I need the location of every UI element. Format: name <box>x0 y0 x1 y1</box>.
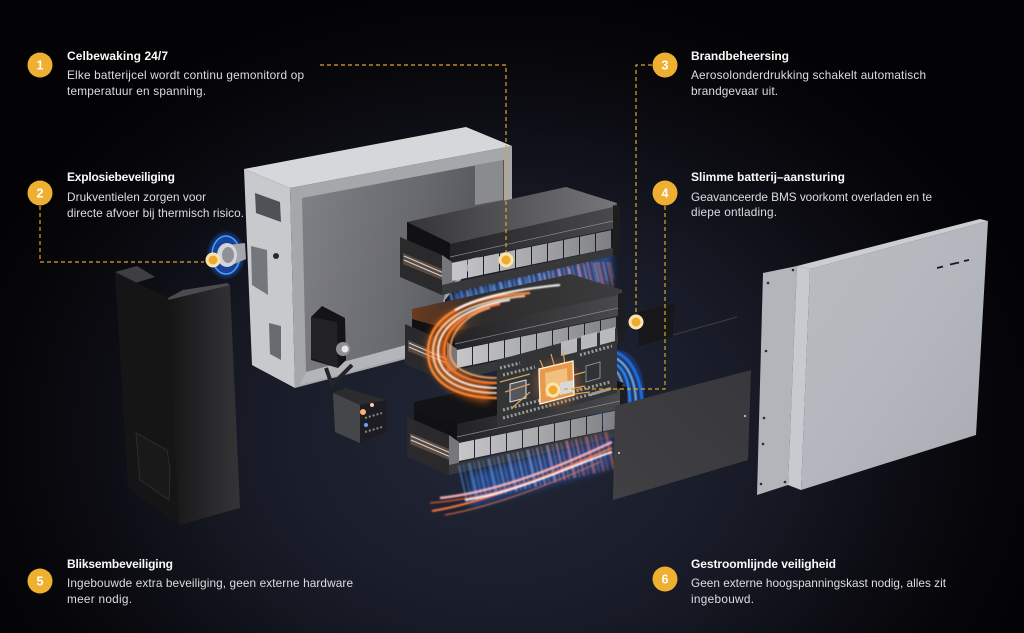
feature 6: Gestroomlijnde veiligheid <box>652 557 947 606</box>
feature 4: Slimme batterij-aansturing: Slimme batterij–aansturing <box>691 170 845 184</box>
feature 6: Gestroomlijnde veiligheid: Geen externe hoogspanningskast nodig, alles zit <box>691 576 947 590</box>
feature 5: Bliksembeveiliging <box>28 557 353 606</box>
feature 1: Celbewaking: Elke batterijcel wordt continu gemonitord op <box>67 68 304 82</box>
feature 4: Slimme batterij-aansturing <box>652 170 932 219</box>
energy streaks: blue arcs right <box>592 350 644 434</box>
feature 2: Explosiebeveiliging: Explosiebeveiliging <box>67 170 175 184</box>
sensor and breaker modules <box>311 306 387 443</box>
feature 5: Bliksembeveiliging: 5 <box>37 574 44 588</box>
energy streaks: bottom <box>430 435 612 515</box>
feature 2: Explosiebeveiliging: directe afvoer bij thermisch risico. <box>67 206 244 220</box>
energy streaks: orange loop <box>428 285 560 398</box>
battery module 2 <box>405 274 625 382</box>
feature 1: Celbewaking: temperatuur en spanning. <box>67 84 206 98</box>
battery module 1 <box>400 187 620 295</box>
feature 3: Brandbeheersing: Aerosolonderdrukking schakelt automatisch <box>691 68 926 82</box>
feature 4: Slimme batterij-aansturing: diepe ontlading. <box>691 205 777 219</box>
feature 4: Slimme batterij-aansturing: Geavanceerde BMS voorkomt overladen en te <box>691 190 932 204</box>
feature 5: Bliksembeveiliging: meer nodig. <box>67 592 132 606</box>
callout line 3 <box>636 65 652 315</box>
feature 4: Slimme batterij-aansturing: 4 <box>662 186 669 200</box>
feature 2: Explosiebeveiliging: 2 <box>37 186 44 200</box>
feature 1: Celbewaking <box>28 49 304 98</box>
feature 5: Bliksembeveiliging: Ingebouwde extra beveiliging, geen externe hardware <box>67 576 353 590</box>
feature 5: Bliksembeveiliging: Bliksembeveiliging <box>67 557 173 571</box>
callout line 1 <box>320 65 506 258</box>
cabinet housing <box>244 127 512 388</box>
feature 6: Gestroomlijnde veiligheid: ingebouwd. <box>691 592 754 606</box>
feature 3: Brandbeheersing: Brandbeheersing <box>691 49 789 63</box>
feature 1: Celbewaking: Celbewaking 24/7 <box>67 49 168 63</box>
grey cover plate <box>613 370 751 500</box>
feature 2: Explosiebeveiliging <box>28 170 244 220</box>
feature 6: Gestroomlijnde veiligheid: 6 <box>662 572 669 586</box>
feature 1: Celbewaking: 1 <box>37 58 44 72</box>
front panel <box>757 219 988 495</box>
feature 3: Brandbeheersing <box>652 49 926 98</box>
icon: pressure vent <box>206 230 246 280</box>
black side cover <box>115 266 240 525</box>
feature 6: Gestroomlijnde veiligheid: Gestroomlijnde veiligheid <box>691 557 836 571</box>
battery module 3 <box>407 367 627 475</box>
feature 3: Brandbeheersing: brandgevaar uit. <box>691 84 778 98</box>
callout line 4 <box>560 206 665 389</box>
small black controller box <box>638 304 737 346</box>
marker dots <box>206 252 644 398</box>
feature 2: Explosiebeveiliging: Drukventielen zorgen voor <box>67 190 206 204</box>
energy streaks: top <box>452 250 612 322</box>
BMS circuit board <box>497 327 617 427</box>
callout line 2 <box>40 206 204 262</box>
feature 3: Brandbeheersing: 3 <box>662 58 669 72</box>
